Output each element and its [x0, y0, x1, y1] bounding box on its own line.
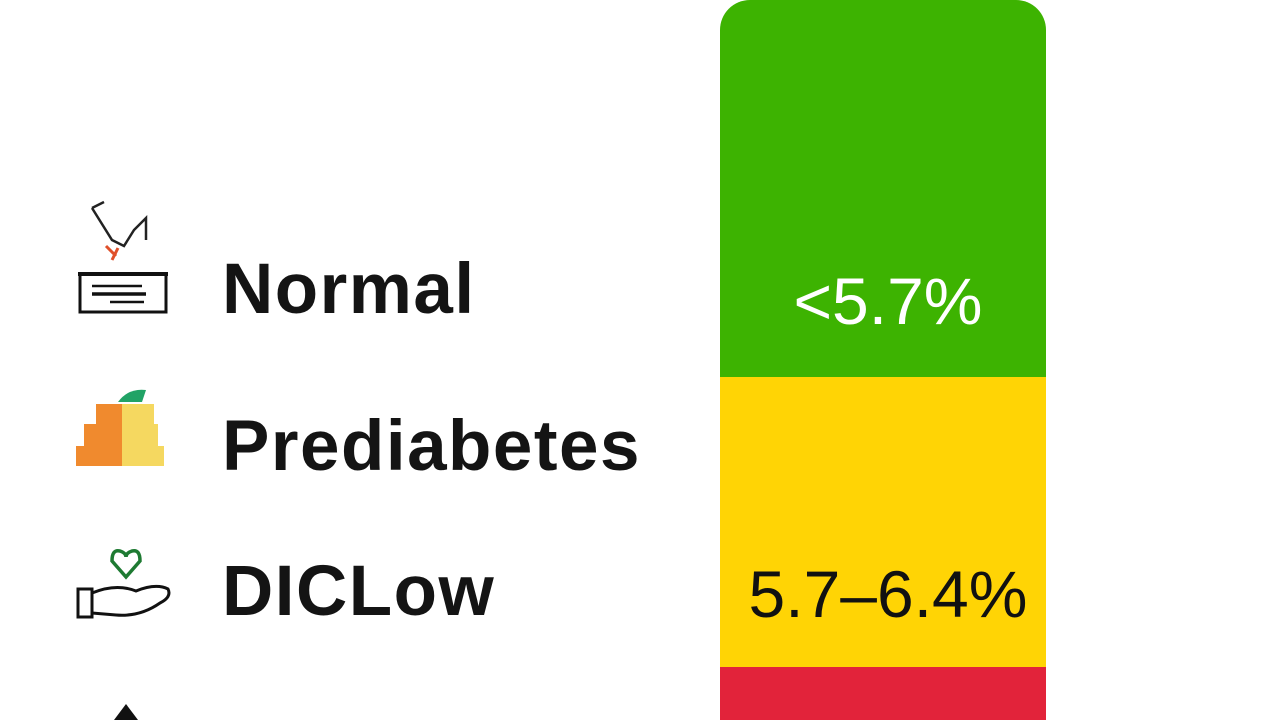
value: <5.7%: <5.7%	[794, 264, 982, 338]
icon: fruit boxes	[76, 390, 164, 466]
segment: diabetes red	[720, 667, 1046, 720]
label: Prediabetes: Prediabetes	[222, 407, 641, 486]
segment: prediabetes yellow	[720, 377, 1046, 667]
segment: normal green	[720, 0, 1046, 377]
icon: partial triangle	[114, 704, 138, 720]
icon: hand with heart	[76, 549, 170, 618]
label: DICLow: DICLow	[222, 552, 495, 631]
label: Normal: Normal	[222, 250, 476, 329]
icon: clipboard with hand	[78, 200, 168, 314]
bar: HbA1c ranges	[720, 0, 1046, 720]
value: 5.7-6.4%: 5.7–6.4%	[749, 557, 1027, 631]
